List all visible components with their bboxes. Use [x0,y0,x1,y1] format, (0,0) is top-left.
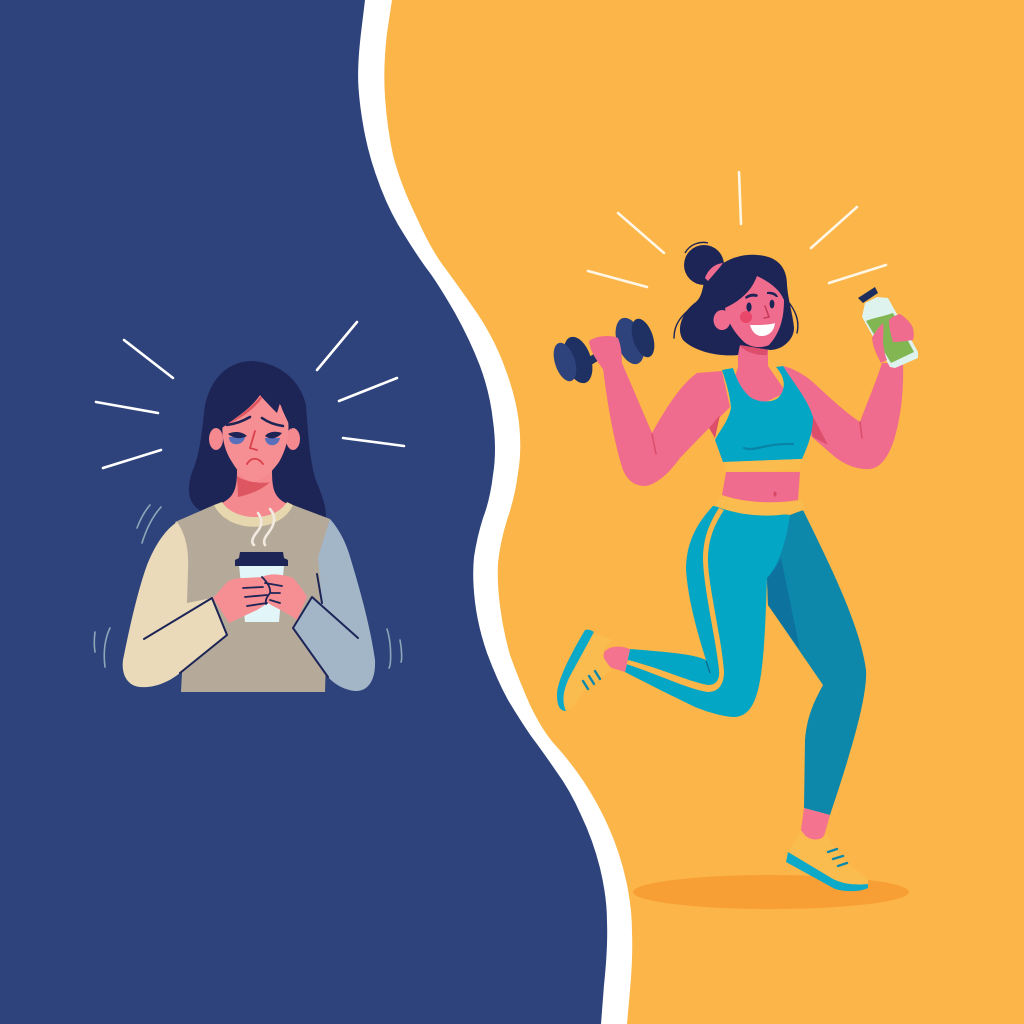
eyes [228,432,282,438]
raised shoe [557,630,613,711]
bun [684,245,724,285]
leg stripe [626,508,724,692]
left outer plate [549,340,581,384]
left arm [603,363,730,486]
bottle fist [889,314,914,342]
cup body [239,565,284,622]
right sleeve [293,519,375,691]
burst lines around energetic woman [588,172,886,287]
sleeve lines [144,574,358,677]
midriff [722,472,800,502]
front leg [625,506,790,717]
left ear [209,428,223,450]
bottle cap [858,287,878,303]
eyes and brows [745,292,778,312]
hair wisps [674,300,798,338]
back shoe [786,830,868,891]
cheek [740,311,752,323]
wavy white divider [300,0,632,1024]
bun strand [685,242,708,253]
dumbbell [549,314,659,387]
laces [828,849,847,866]
fringe [216,380,292,430]
lid [235,552,288,566]
fingers [243,577,282,606]
hair tie [705,263,723,281]
laces [583,671,600,689]
right underarm shadow [798,388,828,445]
raised foot ankle [604,647,630,672]
neck [214,470,293,524]
bra seam [744,444,793,449]
right ear [286,428,300,450]
neck [730,340,786,405]
shoe sole [786,852,868,891]
bra band [724,459,802,472]
right hand [262,574,307,620]
shoe upper [562,632,613,710]
tired woman illustration [94,322,404,692]
collar [214,502,293,527]
sports bra [715,366,813,462]
eyebrows [227,417,283,426]
waistband [715,495,804,516]
inner leg shadow [767,558,800,650]
energetic woman illustration [549,172,918,909]
hair [674,242,798,355]
bottle thumb [872,323,887,363]
ground shadow [633,875,909,909]
left inner plate [558,333,598,387]
panel: tired navy background [0,0,607,1024]
water bottle [858,287,918,368]
right outer plate [627,316,659,360]
left eye bag [229,437,245,444]
burst lines around tired woman [96,322,404,468]
right eye bag [265,438,280,445]
bottle body [862,297,918,368]
left sleeve [123,522,227,687]
shoe upper [786,830,868,887]
nose [764,306,769,318]
neck shadow [739,340,768,355]
face [222,395,289,482]
left underarm shadow [709,415,720,438]
back leg [767,510,866,815]
right inner plate [610,314,650,368]
hair mass [680,255,794,355]
face [725,276,784,347]
steam [252,509,274,545]
left hand [213,577,268,623]
bottle liquid [866,313,914,363]
knee crease [706,661,710,673]
nose and frown [247,431,263,464]
back ankle [801,808,830,841]
shake marks [94,505,402,668]
shoe sole [557,630,594,711]
ear [714,310,730,330]
smile [750,323,775,336]
fringe shadow [225,396,262,426]
hair back [189,361,326,517]
coffee cup [235,552,288,622]
left hand [589,336,622,372]
right arm [783,363,903,469]
neck shadow [237,476,270,497]
arm creases [652,422,862,454]
navel [773,491,777,497]
bar [585,340,625,364]
sweater torso [175,505,330,692]
